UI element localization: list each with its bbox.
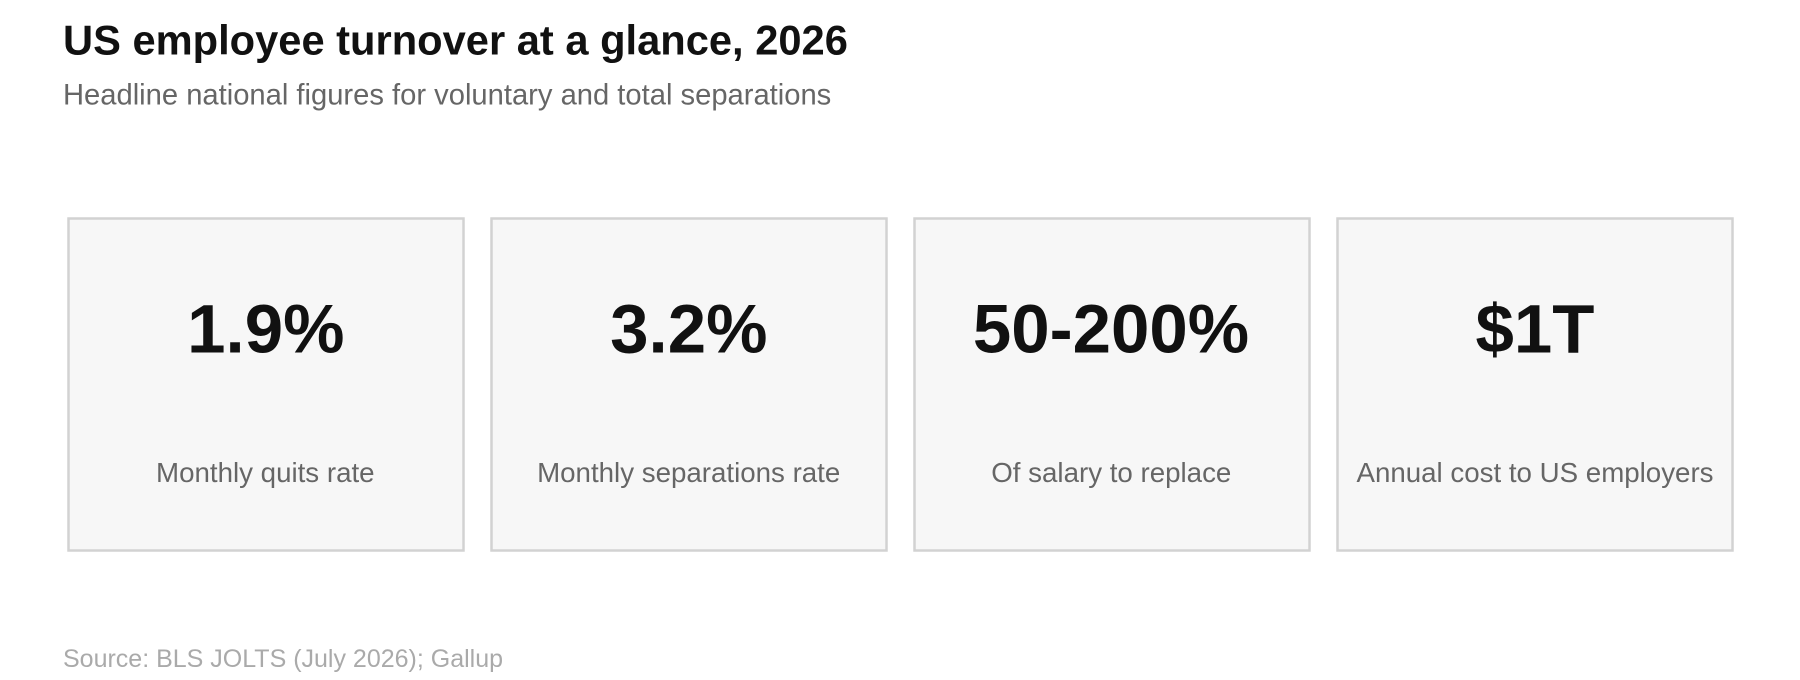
panel: monthly quits rate — [68, 218, 464, 550]
label: of salary to replace: Of salary to replace — [991, 457, 1231, 488]
label: annual cost to US employers: Annual cost to US employers — [1356, 457, 1714, 488]
value: 50-200%: 50-200% — [973, 290, 1249, 368]
value: 3.2%: 3.2% — [610, 290, 767, 368]
panel: monthly separations rate — [492, 218, 886, 550]
value: $1T: $1T — [1476, 290, 1594, 368]
title: US employee turnover at a glance, 2026 — [63, 16, 848, 64]
source note: Source: BLS JOLTS (July 2026); Gallup — [63, 645, 503, 673]
subtitle: Headline national figures for voluntary and total separations — [63, 80, 831, 112]
panel: salary to replace — [914, 218, 1310, 550]
panel: annual cost — [1338, 218, 1732, 550]
label: monthly quits rate: Monthly quits rate — [156, 457, 375, 488]
label: monthly separations rate: Monthly separations rate — [537, 457, 840, 488]
value: 1.9%: 1.9% — [187, 290, 344, 368]
